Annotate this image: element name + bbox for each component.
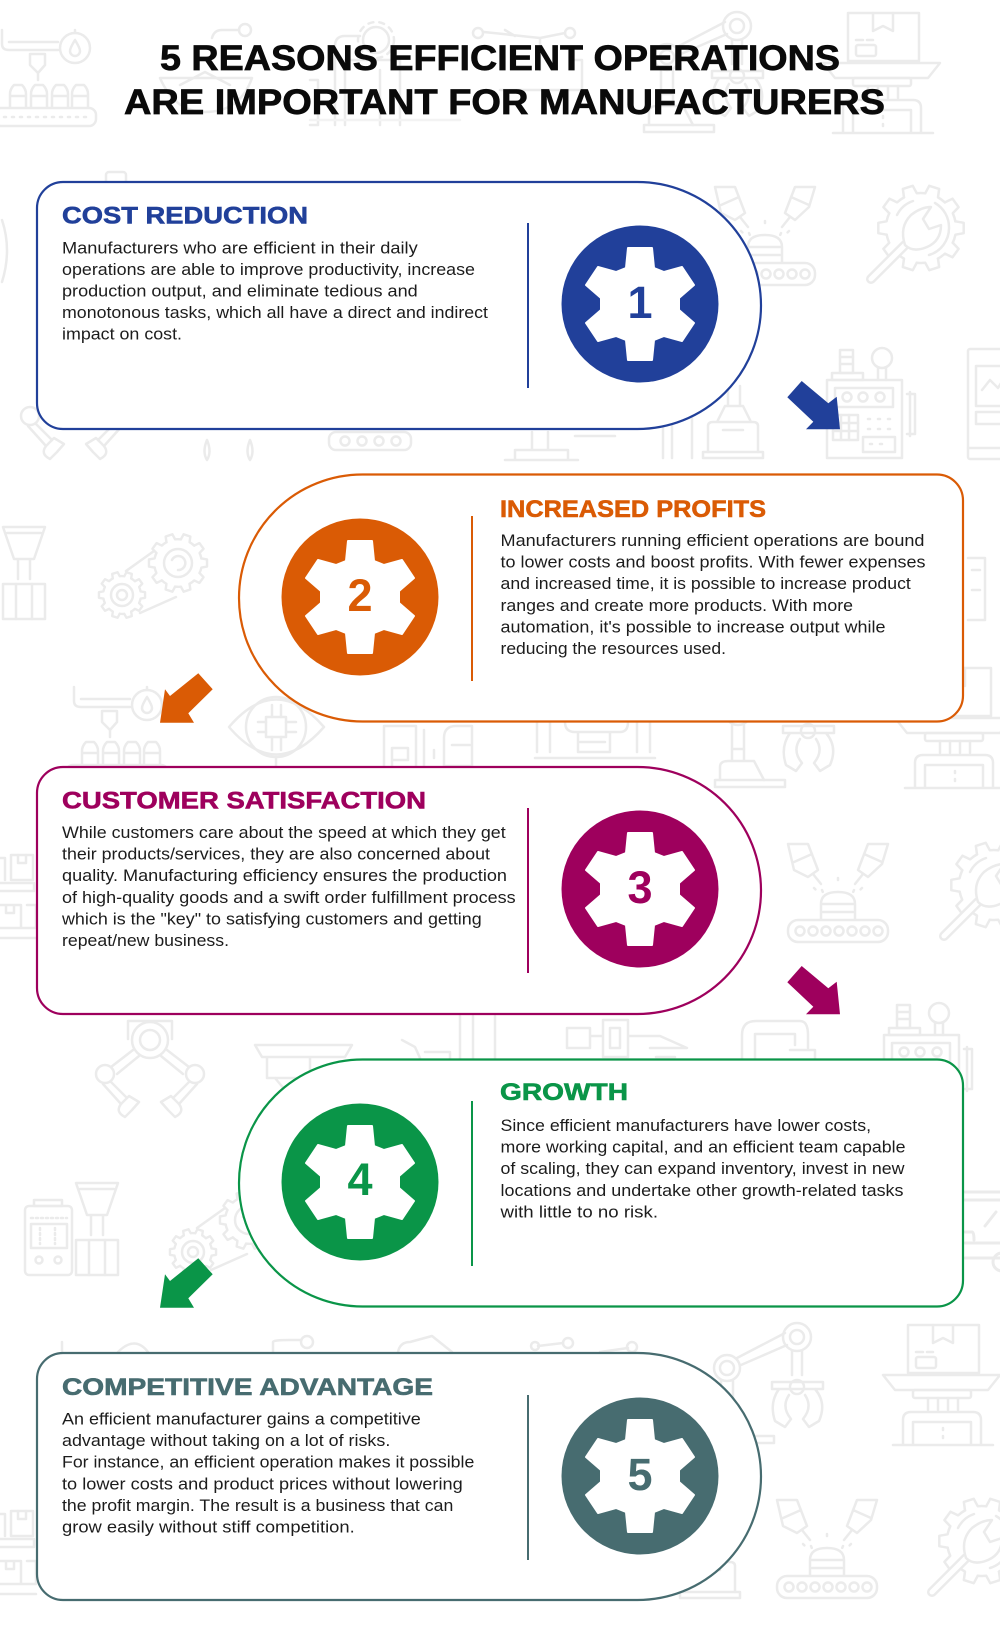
text block: competitive advantage: to lower costs and product prices without lowering xyxy=(62,1474,463,1493)
icon: gear number 4 xyxy=(282,1104,438,1260)
icon: pedestal under panel 1 xyxy=(703,386,763,458)
icon: tablet xyxy=(968,349,1000,459)
icon: node peeks above panel 5 xyxy=(301,1336,637,1352)
text block: competitive advantage: For instance, an efficient operation makes it possible xyxy=(62,1453,474,1472)
icon: conveyor nozzle, row 2 xyxy=(66,687,168,783)
text block: cost reduction: operations are able to improve productivity, increase xyxy=(62,260,475,279)
icon: gear number 4: 4 xyxy=(347,1154,373,1205)
text block: cost reduction xyxy=(62,238,488,343)
icon: machine, row 4 xyxy=(567,1020,687,1057)
icon: gears and belt, row 2 xyxy=(99,532,207,619)
icon: funnel and box, row 2 xyxy=(3,527,45,619)
icon: press base, row 2 xyxy=(535,722,655,758)
icon: spray arms on conveyor, row 3 xyxy=(788,844,888,942)
icon: gear number 2: 2 xyxy=(347,570,373,621)
icon: robot arm, row 5 xyxy=(704,1323,823,1443)
icon: gear number 3: 3 xyxy=(627,862,653,913)
icon: package press, top right xyxy=(823,13,940,133)
icon: spray arms, row 5 xyxy=(777,1500,877,1598)
icon: small box peek above panel 1 xyxy=(106,172,126,202)
icon: pedestal, row 5 xyxy=(680,1526,740,1598)
icon: machine two, row 4 xyxy=(742,1021,815,1060)
text block: competitive advantage: An efficient manufacturer gains a competitive xyxy=(62,1410,421,1428)
text block: competitive advantage xyxy=(62,1410,474,1536)
text block: customer satisfaction: their products/services, they are also concerned about xyxy=(62,845,490,864)
icon: wrench in gear, row 1 xyxy=(871,183,964,279)
text block: growth xyxy=(499,1116,906,1221)
text block: increased profits: to lower costs and boost profits. With fewer expenses xyxy=(500,553,926,572)
arrow: down left green xyxy=(160,1258,213,1308)
icon: gear number 2 xyxy=(282,518,438,676)
icon: gear number 5 xyxy=(562,1398,718,1554)
icon: faint machinery behind title xyxy=(160,22,582,125)
arrow: down left orange xyxy=(160,673,213,723)
text block: cost reduction: monotonous tasks, which all have a direct and indirect xyxy=(62,303,488,322)
text block: increased profits: Manufacturers running efficient operations are bound xyxy=(500,531,924,550)
icon: control panel, row 4 xyxy=(884,1003,972,1113)
icon: robot arm behind title xyxy=(644,12,763,132)
icon: box beside pedestal xyxy=(663,400,700,458)
text block: increased profits: and increased time, it is possible to increase product xyxy=(500,574,911,593)
panel: competitive advantage xyxy=(37,1353,761,1600)
text block: cost reduction: production output, and eliminate tedious and xyxy=(62,282,418,301)
text block: increased profits: reducing the resources used. xyxy=(500,639,726,658)
text block: growth: locations and undertake other growth-related tasks xyxy=(500,1181,904,1200)
heading: growth: GROWTH xyxy=(500,1079,628,1106)
text block: customer satisfaction: quality. Manufacturing efficiency ensures the production xyxy=(62,866,507,885)
text block: increased profits: automation, it's possible to increase output while xyxy=(500,617,886,636)
text block: growth: Since efficient manufacturers have lower costs, xyxy=(500,1116,871,1135)
arrow: down right blue xyxy=(787,381,840,429)
text block: growth: more working capital, and an efficient team capable xyxy=(500,1138,906,1157)
icon: robot with claw, row 2 xyxy=(715,667,834,787)
icon: conveyor with nozzle, top left xyxy=(0,30,96,126)
icon: gear number 3 xyxy=(562,810,718,968)
text block: increased profits: ranges and create more products. With more xyxy=(500,596,853,615)
text block: competitive advantage: the profit margin. The result is a business that can xyxy=(62,1496,453,1515)
icon: claw arms, row 4 xyxy=(96,1021,204,1117)
icon: package press, row 2 xyxy=(895,668,1000,788)
icon: left edge shelves, row 3 xyxy=(0,855,36,938)
icon: peeks above panel 5 xyxy=(62,1336,452,1355)
arrow: down right magenta xyxy=(787,966,840,1014)
text block: customer satisfaction: which is the "key" to satisfying customers and getting xyxy=(61,909,482,928)
icon: spray arms on conveyor, row 1 xyxy=(715,187,815,285)
icon: gears and belt, row 5 xyxy=(170,1189,278,1276)
icon: wrench in gear, row 3 xyxy=(944,840,1000,936)
icon: package press, row 5 xyxy=(883,1325,1000,1445)
icon: left edge circle xyxy=(2,220,7,282)
icon: claw arms under panel 1 xyxy=(21,363,129,459)
text block: cost reduction: impact on cost. xyxy=(62,324,182,343)
panel: increased profits xyxy=(239,474,963,722)
icon: cabinets, row 2 xyxy=(384,726,472,766)
icon: tray device, row 4 xyxy=(255,1045,352,1090)
icon: gear number 5: 5 xyxy=(627,1449,653,1500)
icon: control panel, row 1 xyxy=(827,348,915,458)
icon: left edge shelves, row 5 xyxy=(0,1511,36,1594)
icon: small control box, row 5 xyxy=(25,1200,72,1275)
heading: increased profits: INCREASED PROFITS xyxy=(500,496,766,523)
text block: competitive advantage: advantage without taking on a lot of risks. xyxy=(62,1431,390,1450)
panel: customer satisfaction xyxy=(37,767,761,1014)
heading: customer satisfaction: CUSTOMER SATISFACTION xyxy=(62,788,426,814)
icon: wrench in gear, row 5 xyxy=(932,1496,1000,1592)
icon: arm and post, row 4 xyxy=(402,1016,495,1062)
icon: right edge bits xyxy=(968,558,985,620)
panel: growth xyxy=(239,1060,963,1306)
heading: competitive advantage: COMPETITIVE ADVANTAGE xyxy=(62,1374,433,1401)
text block: customer satisfaction: While customers care about the speed at which they get xyxy=(62,823,506,842)
icon: gear number 1 xyxy=(562,226,718,382)
text block: growth: with little to no risk. xyxy=(499,1202,658,1221)
text block: increased profits xyxy=(500,531,926,658)
title: 5 REASONS EFFICIENT OPERATIONS xyxy=(160,39,840,78)
text block: cost reduction: Manufacturers who are efficient in their daily xyxy=(62,238,418,258)
icon: conveyor under panel 1 xyxy=(329,432,411,450)
icon: base under panel 1 xyxy=(505,432,615,460)
text block: competitive advantage: grow easily without stiff competition. xyxy=(62,1518,355,1536)
icon: gear number 1: 1 xyxy=(627,277,653,328)
icon: funnel and box, row 5 xyxy=(76,1183,118,1275)
text block: growth: of scaling, they can expand inventory, invest in new xyxy=(500,1159,905,1178)
title: ARE IMPORTANT FOR MANUFACTURERS xyxy=(124,83,885,122)
icon: nozzles under panel 1 xyxy=(204,440,252,460)
heading: cost reduction: COST REDUCTION xyxy=(62,202,308,230)
icon: eye with chip xyxy=(229,697,324,766)
icon: right edge machine, row 4 xyxy=(965,1192,1000,1271)
text block: customer satisfaction: repeat/new business. xyxy=(62,931,229,950)
panel: cost reduction xyxy=(37,182,761,429)
text block: customer satisfaction: of high-quality goods and a swift order fulfillment process xyxy=(62,888,516,907)
text block: customer satisfaction xyxy=(61,823,516,950)
title xyxy=(124,39,885,122)
